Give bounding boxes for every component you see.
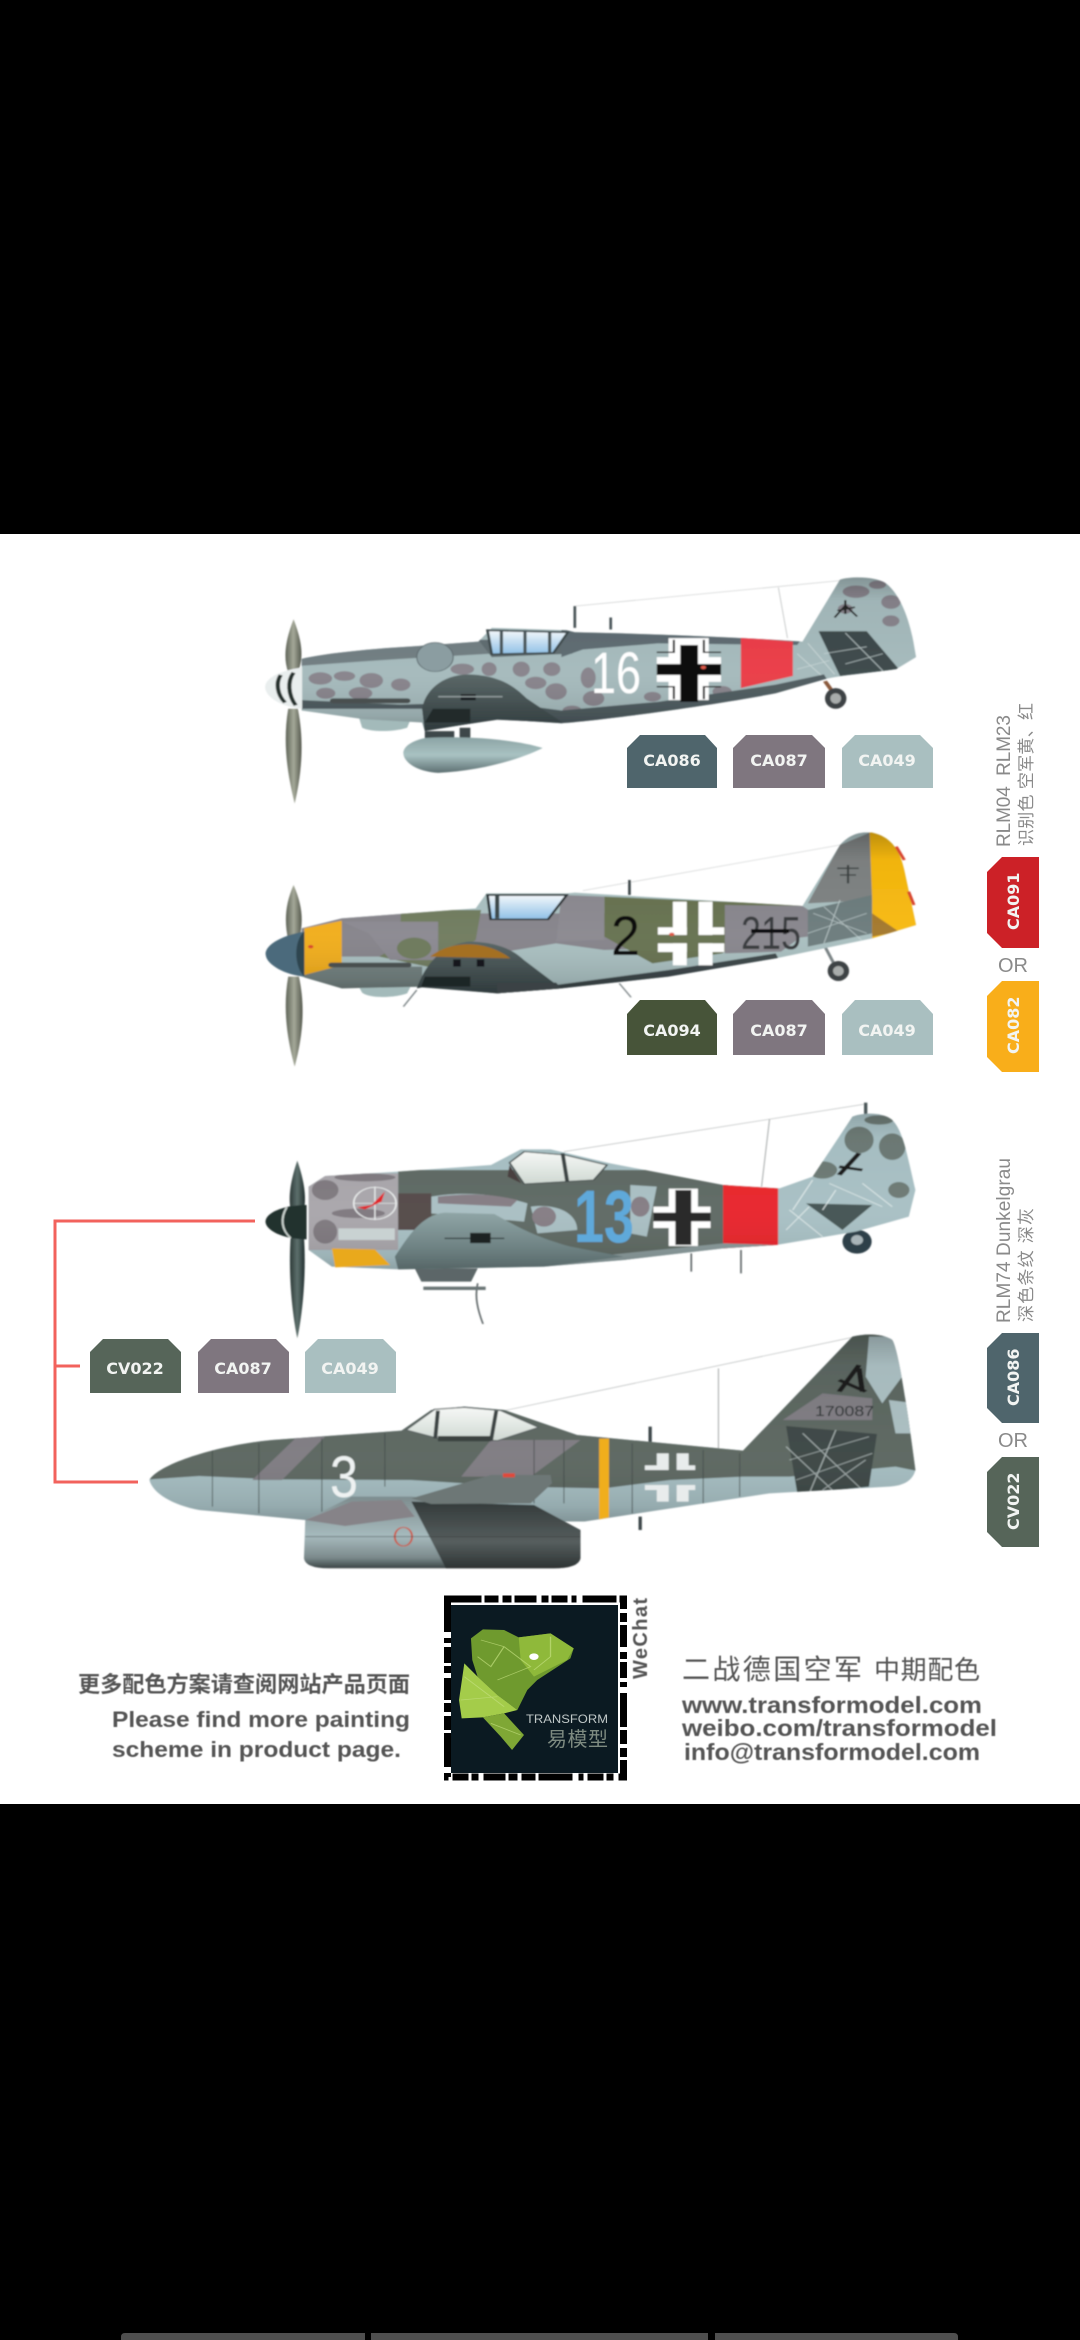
balkenkreuz	[658, 902, 724, 965]
tail wheel	[842, 1230, 872, 1254]
number 16: 16	[591, 641, 641, 706]
label Chinese stripe colours: 深色条纹 深灰	[1017, 1208, 1036, 1322]
swatch CA091: CA091	[1004, 872, 1023, 930]
swatch CA049: CA049	[858, 751, 916, 770]
swatch CA086: CA086	[1004, 1348, 1023, 1406]
WeChat label: WeChat	[630, 1598, 652, 1679]
label RLM04 RLM23: RLM04 RLM23	[994, 715, 1015, 847]
swatch CA082: CA082	[1004, 996, 1023, 1054]
balkenkreuz	[657, 638, 721, 702]
tail wheel	[825, 947, 835, 965]
drop tank	[425, 728, 470, 743]
QR modules	[448, 1599, 624, 1777]
plane 4: Me 262 with white 3	[139, 1330, 929, 1568]
swatch CV022: CV022	[106, 1359, 164, 1378]
canopy	[487, 630, 568, 654]
swatch CA086: CA086	[643, 751, 701, 770]
exhaust row	[328, 963, 411, 967]
canopy	[510, 1152, 607, 1184]
wing root	[422, 674, 562, 730]
Chinese title: 二战德国空军	[682, 1654, 862, 1685]
swatch row 3	[90, 1339, 396, 1393]
antenna wire and mast	[504, 1337, 852, 1448]
supercharger intake	[417, 643, 453, 672]
exhaust row	[330, 698, 410, 703]
fin emblem	[839, 1365, 866, 1392]
swatch row 1	[627, 735, 933, 788]
plane 3: Fw 190 with blue 13	[265, 1103, 929, 1338]
website: www.transformodel.com	[681, 1692, 982, 1718]
yellow band	[599, 1439, 609, 1519]
swatch CA049: CA049	[858, 1021, 916, 1040]
swatch CA087	[733, 1000, 825, 1055]
weibo: weibo.com/transformodel	[681, 1715, 997, 1741]
fin code	[837, 865, 859, 883]
open cross	[645, 1453, 695, 1502]
segment right	[715, 2333, 958, 2340]
swatch CA049	[842, 1000, 933, 1055]
antenna wire	[583, 845, 840, 891]
swatch CV022	[987, 1457, 1039, 1547]
email: info@transformodel.com	[684, 1739, 980, 1765]
fin emblem	[839, 1153, 862, 1175]
painted-out code 215: 215	[741, 907, 801, 959]
balkenkreuz	[653, 1189, 710, 1246]
yellow chin	[332, 1248, 390, 1267]
propeller and spinner	[285, 619, 301, 673]
chin intake	[359, 717, 411, 731]
Chinese subtitle: 中期配色	[874, 1655, 980, 1685]
swatch CV022	[90, 1339, 181, 1393]
wing root	[395, 1213, 624, 1269]
English note line 1: Please find more painting	[112, 1707, 410, 1732]
Chinese note: 更多配色方案请查阅网站产品页面	[78, 1672, 410, 1697]
swatch CA087: CA087	[750, 1021, 808, 1040]
swatch row 2	[627, 1000, 933, 1055]
label Chinese identification colours: 识别色 空军黄、红	[1017, 703, 1036, 846]
OR label: OR	[998, 955, 1028, 977]
rudder balance marks	[896, 847, 914, 905]
logo wordmark: TRANSFORM	[526, 1712, 608, 1726]
logo Chinese name: 易模型	[547, 1728, 608, 1751]
swatch CA087	[733, 735, 825, 788]
OR label: OR	[998, 1430, 1028, 1452]
swatch CA049	[842, 735, 933, 788]
label RLM74 Dunkelgrau: RLM74 Dunkelgrau	[994, 1158, 1015, 1323]
segment left	[121, 2333, 365, 2340]
number 2: 2	[611, 904, 640, 967]
side bulge	[397, 938, 431, 959]
red bracket connector	[55, 1221, 255, 1482]
propeller and spinner	[286, 885, 302, 940]
swatch CA091	[987, 857, 1039, 948]
number 13: 13	[574, 1175, 634, 1258]
number 3: 3	[330, 1445, 358, 1510]
chameleon	[459, 1629, 574, 1750]
tail wheel	[825, 681, 832, 692]
canopy	[487, 895, 567, 919]
side column: RLM74 stripe colours	[987, 1158, 1039, 1547]
logo square	[451, 1605, 618, 1773]
bottom segmented bar	[121, 2333, 958, 2340]
footer note left	[78, 1672, 410, 1762]
white artwork panel	[0, 534, 1080, 1804]
plane 2: Bf 109 with black 2 and yellow nose	[261, 830, 926, 1067]
canopy	[406, 1407, 539, 1441]
wing	[411, 1475, 552, 1504]
swatch CA049: CA049	[321, 1359, 379, 1378]
swatch CA049	[305, 1339, 396, 1393]
swatch CA087: CA087	[750, 751, 808, 770]
tail serial number: 170087	[815, 1403, 874, 1420]
propeller and spinner	[290, 1161, 305, 1210]
swatch CA094	[627, 1000, 717, 1055]
nacelle	[304, 1497, 581, 1568]
swatch CA086	[987, 1333, 1039, 1423]
antenna wire and mast	[564, 1104, 866, 1187]
side column: identification colours	[987, 703, 1039, 1072]
fin code	[835, 600, 857, 617]
swatch CA086	[627, 735, 717, 788]
segment middle	[371, 2333, 708, 2340]
footer contact block	[681, 1654, 997, 1765]
unit badge	[353, 1187, 397, 1220]
QR code with chameleon logo	[448, 1599, 624, 1777]
wing root	[417, 942, 561, 993]
swatch CV022: CV022	[1004, 1472, 1023, 1530]
swatch CA094: CA094	[643, 1021, 701, 1040]
English note line 2: scheme in product page.	[112, 1737, 401, 1762]
chin intake	[358, 985, 411, 997]
swatch CA082	[987, 981, 1039, 1072]
antenna wire	[575, 581, 840, 638]
swatch CA087	[198, 1339, 289, 1393]
undercarriage details	[476, 1250, 741, 1324]
swatch CA087: CA087	[214, 1359, 272, 1378]
plane 1: Bf 109 with white 16	[261, 571, 926, 803]
